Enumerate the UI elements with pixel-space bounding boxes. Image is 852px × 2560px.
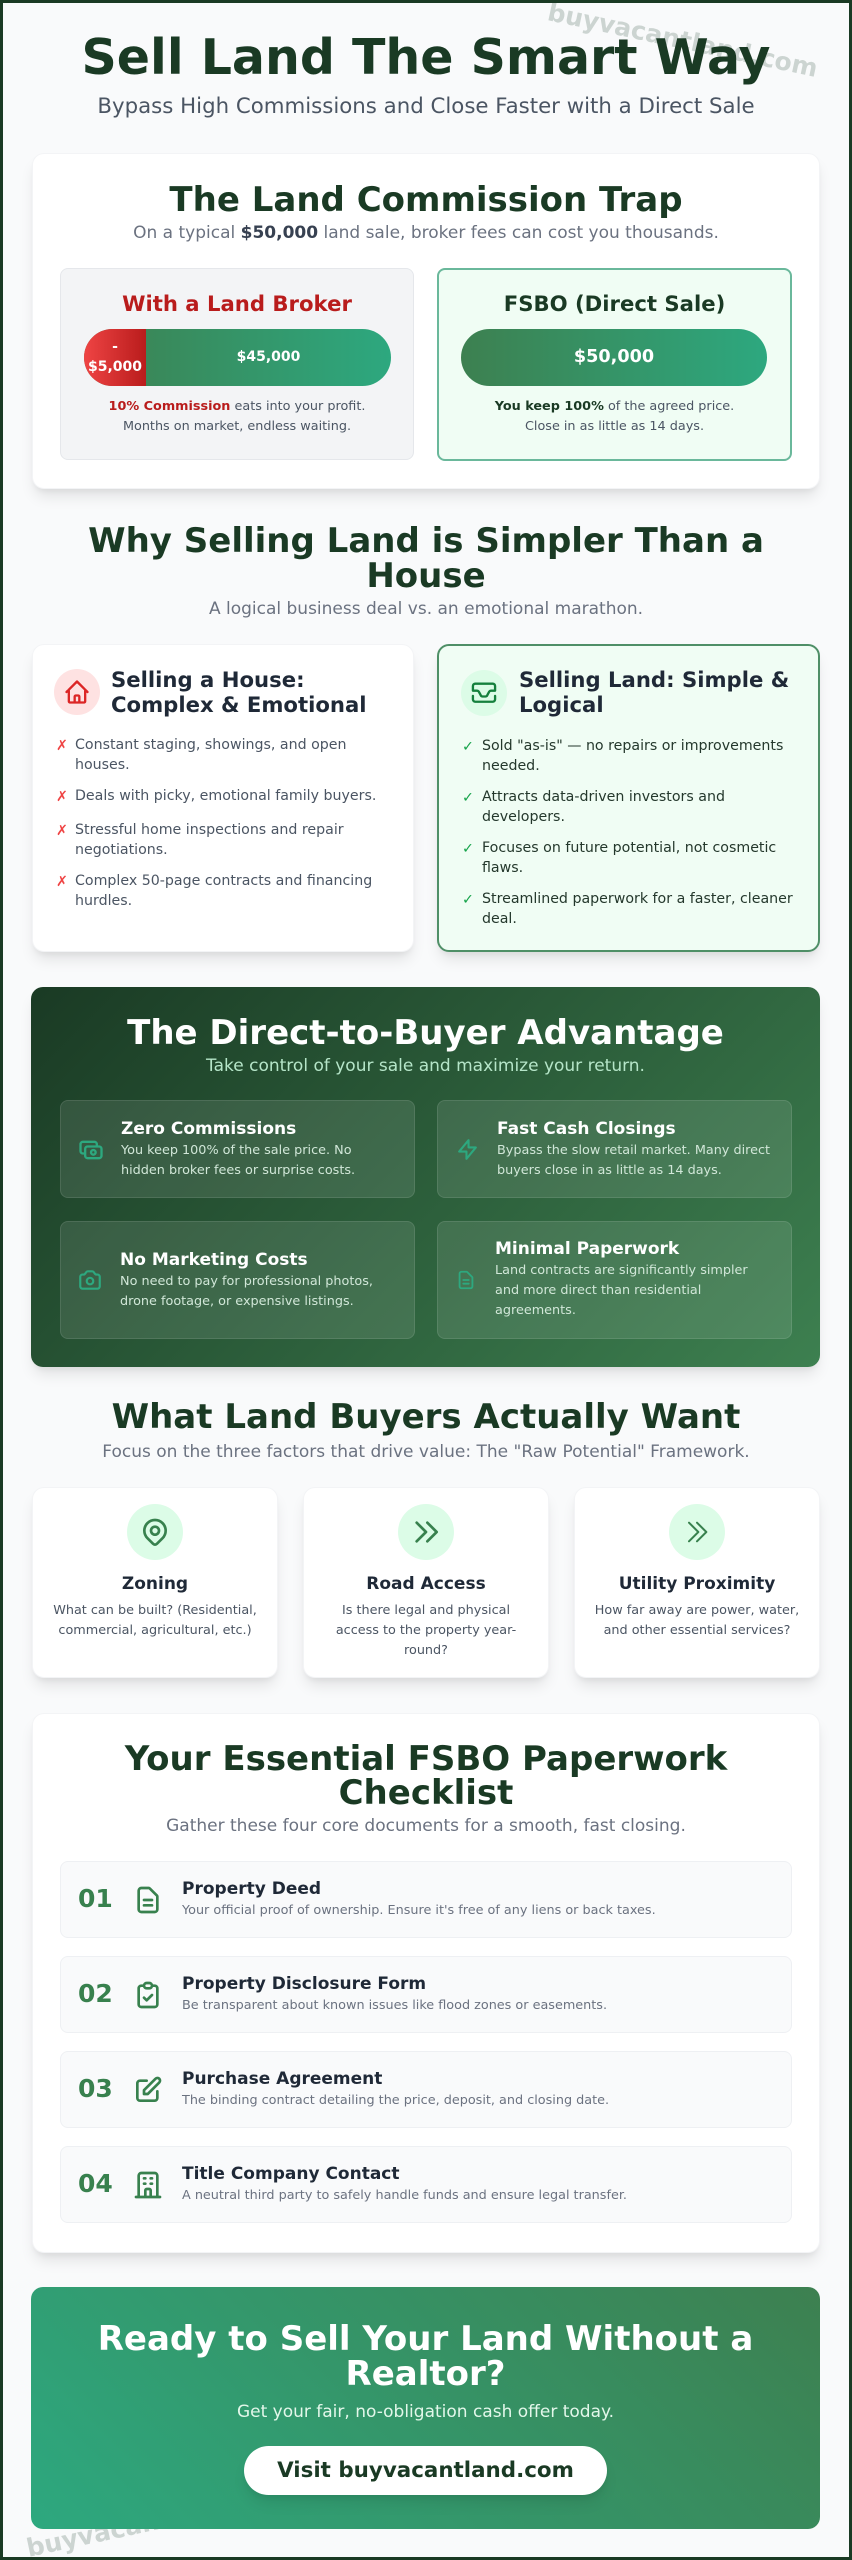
text: fsbo summary: Close in as little as 14 days.	[525, 419, 704, 434]
text: why selling intro: A logical business deal vs. an emotional marathon.	[209, 599, 643, 619]
heading: the land commission trap: The Land Commission Trap	[169, 180, 683, 220]
checklist item: title company: 04	[78, 2169, 113, 2198]
heading: selling land	[519, 667, 789, 717]
heading: call to action: Realtor?	[346, 2354, 505, 2394]
list: house drawbacks	[56, 737, 376, 909]
heading: selling land: Logical	[519, 692, 604, 717]
list: house drawbacks: Constant staging, showings, and open	[75, 737, 347, 753]
button: visit site: Visit buyvacantland.com	[277, 2458, 574, 2483]
icon: clipboard check	[137, 1982, 159, 2008]
list: land benefits: ✓	[462, 739, 474, 755]
list: land benefits: ✓	[462, 841, 474, 857]
text: title company	[182, 2164, 627, 2203]
panel: zoning	[32, 1487, 278, 1678]
icon: land	[461, 670, 507, 716]
panel: direct-to-buyer advantage	[31, 987, 820, 1367]
icon: house	[54, 669, 100, 715]
list: house drawbacks: houses.	[75, 757, 130, 773]
bar segment: commission: $5,000	[88, 359, 142, 375]
list: land benefits: needed.	[482, 758, 540, 774]
icon: lightning	[458, 1139, 477, 1160]
icon: office building	[134, 2172, 162, 2198]
text: purchase agreement: Purchase Agreement	[182, 2069, 382, 2089]
heading: selling a house: Complex & Emotional	[111, 692, 367, 717]
text: no marketing costs	[120, 1250, 373, 1309]
panel: paperwork checklist	[32, 1713, 820, 2253]
panel: road access	[303, 1487, 549, 1678]
list: house drawbacks: Deals with picky, emotional family buyers.	[75, 788, 376, 804]
list: house drawbacks: hurdles.	[75, 893, 132, 909]
text: utility proximity title: Utility Proximity	[619, 1574, 775, 1594]
panel: the land commission trap	[32, 153, 820, 489]
panel: call to action	[31, 2287, 820, 2529]
icon: cash	[79, 1140, 103, 1160]
text: fsbo summary	[494, 399, 734, 434]
list: land benefits: Focuses on future potential, not cosmetic	[482, 840, 776, 856]
card: fast cash closings	[437, 1100, 792, 1198]
text: minimal paperwork: Land contracts are significantly simpler	[495, 1263, 748, 1278]
text: checklist intro: Gather these four core documents for a smooth, fast closing.	[166, 1816, 686, 1836]
heading: why selling land is simpler: House	[366, 556, 486, 596]
text: broker summary: 10% Commission eats into your profit.	[109, 399, 365, 414]
heading: fsbo direct sale: FSBO (Direct Sale)	[504, 291, 725, 316]
text: zoning description	[53, 1603, 257, 1638]
icon: double chevron bold	[398, 1504, 454, 1560]
list: land benefits: deal.	[482, 911, 517, 927]
text: fast cash closings: Bypass the slow retail market. Many direct	[497, 1143, 770, 1158]
card: no marketing costs	[60, 1221, 415, 1339]
text: disclosure form: Be transparent about known issues like flood zones or easements.	[182, 1998, 607, 2013]
card: minimal paperwork	[437, 1221, 792, 1339]
text: title company: A neutral third party to safely handle funds and ensure legal transfer.	[182, 2188, 627, 2203]
text: advantage intro: Take control of your sale and maximize your return.	[206, 1056, 645, 1076]
text: disclosure form	[182, 1974, 607, 2013]
subtitle: Bypass High Commissions and Close Faster with a Direct Sale	[97, 94, 755, 119]
text: fast cash closings	[497, 1119, 770, 1178]
panel: selling land	[437, 644, 820, 952]
panel: selling a house	[32, 644, 414, 952]
text: property deed: Your official proof of ownership. Ensure it's free of any liens or back taxes.	[182, 1903, 656, 1918]
text: commission intro: On a typical $50,000 land sale, broker fees can cost you thousands.	[133, 223, 719, 243]
list: land benefits: Attracts data-driven investors and	[482, 789, 725, 805]
text: buyers intro: Focus on the three factors that drive value: The "Raw Potential" Framework.	[102, 1442, 750, 1462]
list: house drawbacks: Stressful home inspections and repair	[75, 822, 344, 838]
text: road access description: access to the property year-	[336, 1623, 516, 1638]
heading: selling a house: Selling a House:	[111, 667, 305, 692]
text: cta subtitle: Get your fair, no-obligation cash offer today.	[237, 2402, 614, 2422]
heading: why selling land is simpler: Why Selling Land is Simpler Than a	[88, 521, 764, 561]
icon: map pin	[127, 1504, 183, 1560]
checklist item: title company	[60, 2146, 792, 2223]
text: no marketing costs: No Marketing Costs	[120, 1250, 308, 1270]
icon: document	[458, 1270, 474, 1290]
icon: pencil square	[136, 2076, 162, 2102]
list: land benefits: Streamlined paperwork for a faster, cleaner	[482, 891, 793, 907]
list: house drawbacks: ✗	[56, 874, 68, 890]
bar: full payout	[461, 329, 767, 386]
text: title company: Title Company Contact	[182, 2164, 400, 2184]
text: utility proximity description	[595, 1603, 799, 1638]
checklist item: property deed	[60, 1861, 792, 1938]
checklist item: property deed: 01	[78, 1884, 113, 1913]
panel: fsbo direct sale	[437, 268, 792, 461]
button: visit site	[244, 2446, 607, 2495]
bar segment: commission	[84, 329, 146, 386]
text: zoning description: What can be built? (Residential,	[53, 1603, 257, 1618]
heading: selling land: Selling Land: Simple &	[519, 667, 789, 692]
bar segment: commission: -	[112, 339, 118, 355]
icon: camera	[79, 1270, 101, 1290]
panel: with a land broker	[60, 268, 414, 460]
text: road access title: Road Access	[366, 1574, 486, 1594]
list: house drawbacks: negotiations.	[75, 842, 168, 858]
text: broker summary: Months on market, endless waiting.	[123, 419, 351, 434]
text: property deed: Property Deed	[182, 1879, 321, 1899]
heading: selling a house	[111, 667, 367, 717]
bar: full payout: $50,000	[574, 347, 654, 367]
checklist item: purchase agreement: 03	[78, 2074, 113, 2103]
text: road access description	[336, 1603, 516, 1658]
list: land benefits	[462, 738, 793, 927]
list: land benefits: ✓	[462, 892, 474, 908]
panel: utility proximity	[574, 1487, 820, 1678]
list: land benefits: ✓	[462, 790, 474, 806]
text: minimal paperwork: Minimal Paperwork	[495, 1239, 679, 1259]
heading: what land buyers want: What Land Buyers Actually Want	[112, 1397, 740, 1437]
heading: why selling land is simpler	[88, 521, 764, 596]
text: zoning title: Zoning	[122, 1574, 188, 1594]
text: road access description: round?	[404, 1643, 448, 1658]
text: minimal paperwork: agreements.	[495, 1303, 576, 1318]
list: land benefits: developers.	[482, 809, 565, 825]
text: minimal paperwork: and more direct than residential	[495, 1283, 701, 1298]
list: land benefits: Sold "as-is" — no repairs or improvements	[482, 738, 783, 754]
text: disclosure form: Property Disclosure Form	[182, 1974, 426, 1994]
text: fast cash closings: Fast Cash Closings	[497, 1119, 676, 1139]
heading: with a land broker: With a Land Broker	[122, 291, 352, 316]
title: Sell Land The Smart Way	[82, 29, 770, 86]
list: house drawbacks: ✗	[56, 823, 68, 839]
text: minimal paperwork	[495, 1239, 748, 1318]
list: house drawbacks: ✗	[56, 738, 68, 754]
text: zoning description: commercial, agricultural, etc.)	[58, 1623, 252, 1638]
text: zero commissions	[121, 1119, 355, 1178]
heading: direct-to-buyer advantage: The Direct-to-Buyer Advantage	[127, 1013, 724, 1053]
text: purchase agreement	[182, 2069, 609, 2108]
bar segment: net amount: $45,000	[237, 349, 300, 365]
heading: paperwork checklist: Your Essential FSBO Paperwork	[125, 1739, 727, 1779]
list: house drawbacks: ✗	[56, 789, 68, 805]
heading: call to action: Ready to Sell Your Land Without a	[98, 2319, 753, 2359]
text: no marketing costs: drone footage, or expensive listings.	[120, 1294, 354, 1309]
bar: broker payout	[84, 329, 391, 386]
checklist item: disclosure form: 02	[78, 1979, 113, 2008]
text: zero commissions: hidden broker fees or surprise costs.	[121, 1163, 355, 1178]
text: utility proximity description: and other essential services?	[604, 1623, 790, 1638]
icon: deed	[137, 1886, 159, 1914]
text: purchase agreement: The binding contract detailing the price, deposit, and closing date.	[182, 2093, 609, 2108]
checklist item: purchase agreement	[60, 2051, 792, 2128]
text: zero commissions: Zero Commissions	[121, 1119, 296, 1139]
icon: double chevron	[669, 1504, 725, 1560]
text: utility proximity description: How far away are power, water,	[595, 1603, 799, 1618]
text: property deed	[182, 1879, 656, 1918]
card: zero commissions	[60, 1100, 415, 1198]
text: fast cash closings: buyers close in as little as 14 days.	[497, 1163, 722, 1178]
text: road access description: Is there legal and physical	[342, 1603, 510, 1618]
text: fsbo summary: You keep 100% of the agreed price.	[495, 399, 734, 414]
text: broker summary	[109, 399, 365, 434]
heading: paperwork checklist: Checklist	[339, 1772, 513, 1812]
checklist item: disclosure form	[60, 1956, 792, 2033]
list: land benefits: flaws.	[482, 860, 523, 876]
heading: call to action	[98, 2319, 753, 2394]
text: zero commissions: You keep 100% of the sale price. No	[121, 1143, 352, 1158]
text: no marketing costs: No need to pay for professional photos,	[120, 1274, 373, 1289]
list: house drawbacks: Complex 50-page contracts and financing	[75, 873, 372, 889]
heading: paperwork checklist	[124, 1739, 728, 1812]
